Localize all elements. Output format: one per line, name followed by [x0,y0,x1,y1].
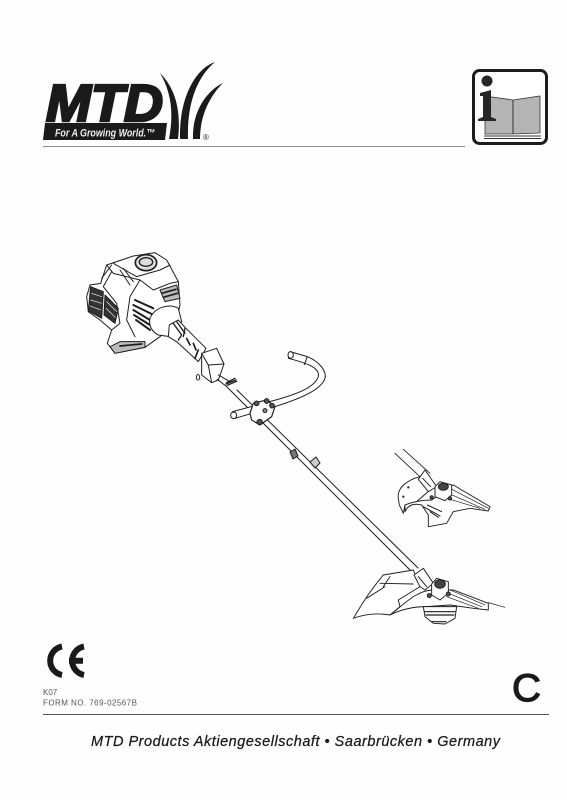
form codes: K07 [43,688,58,697]
air filter grille [88,287,103,318]
form codes: FORM NO. 769-02567B [43,698,137,708]
shaft collar [226,378,237,385]
logo tagline bar [43,123,167,140]
letter i [478,76,496,121]
gear head [414,568,433,590]
fuel cap [135,255,157,271]
base [110,342,145,353]
trimmer illustration [87,253,505,624]
form codes [43,688,137,708]
MTD logo [43,62,223,142]
edition letter C: C [512,667,541,710]
handlebar and clamp [231,352,325,425]
gearbox [202,348,224,383]
logo grass blades [160,62,223,139]
throttle block [160,285,180,302]
company line: MTD Products Aktiengesellschaft • Saarbrücken • Germany [91,734,501,750]
logo wordmark: MTD [46,75,163,133]
book pages [485,96,540,134]
shaft joints [290,449,320,468]
cylinder fins [133,300,153,330]
footer rule [43,714,549,715]
registered mark: ® [203,133,209,142]
header rule [43,146,465,147]
line spool [423,607,457,624]
logo tagline bar: For A Growing World.™ [55,128,155,140]
engine and handle grip [87,253,237,387]
CE mark [50,646,84,675]
lower cutting head [353,568,505,624]
main shaft [227,387,418,572]
clutch cone [150,306,182,337]
inset upper cutting head [395,449,490,527]
icon: read the manual [474,70,546,144]
